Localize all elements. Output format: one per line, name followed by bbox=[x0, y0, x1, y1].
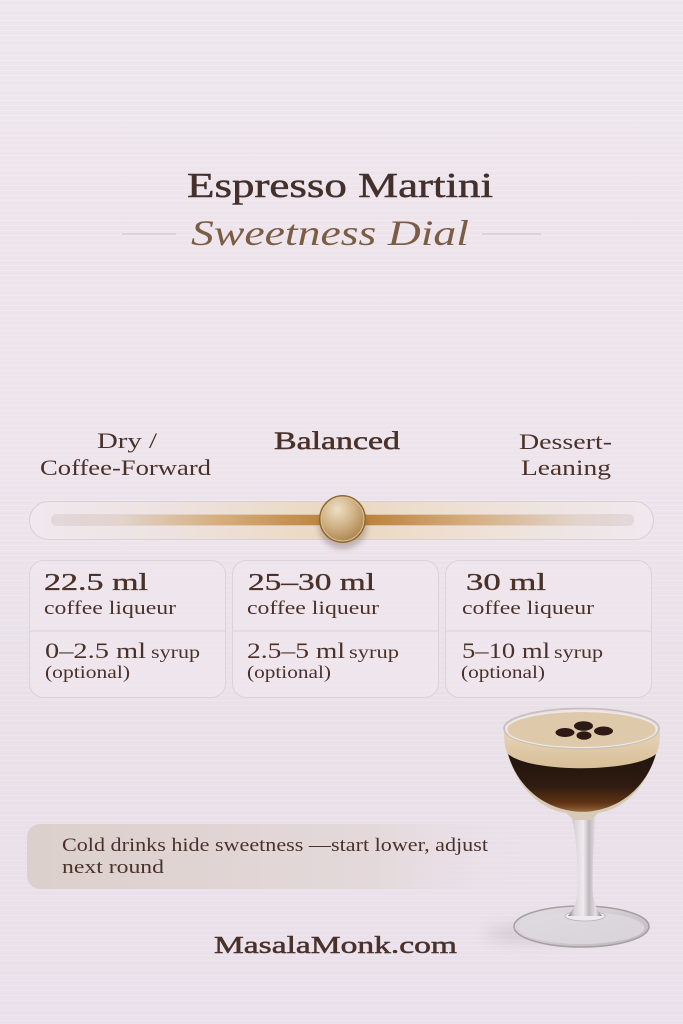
label: dry: Dry / bbox=[97, 428, 158, 453]
coffee liquid bbox=[508, 754, 656, 812]
label: dry: Coffee-Forward bbox=[40, 455, 211, 480]
icon: espresso martini glass bbox=[485, 708, 660, 947]
title: Espresso Martini bbox=[187, 166, 493, 205]
callout bbox=[27, 824, 527, 889]
coffee beans bbox=[556, 721, 613, 740]
card: dry: syrup bbox=[151, 642, 200, 662]
callout: next round bbox=[62, 858, 165, 878]
callout: Cold drinks hide sweetness —start lower, adjust bbox=[62, 836, 489, 856]
card: balanced: 25–30 ml bbox=[248, 570, 375, 596]
card: dry: 22.5 ml bbox=[44, 570, 148, 596]
glass bowl bbox=[504, 732, 660, 820]
title bbox=[187, 166, 493, 253]
slider knob bbox=[319, 495, 366, 543]
card: balanced: syrup bbox=[349, 642, 399, 662]
card: dry bbox=[30, 560, 226, 698]
card: dry: (optional) bbox=[45, 662, 130, 683]
subtitle rule: left bbox=[122, 233, 176, 235]
card: balanced: coffee liqueur bbox=[247, 598, 380, 619]
card: balanced: 2.5–5 ml bbox=[247, 638, 345, 663]
glass stem bbox=[568, 818, 602, 916]
card: balanced: (optional) bbox=[247, 662, 331, 683]
foam layer bbox=[504, 732, 660, 768]
card: dry: coffee liqueur bbox=[44, 598, 177, 619]
slider bbox=[30, 495, 654, 549]
website: MasalaMonk.com bbox=[214, 933, 457, 959]
card: dry: 0–2.5 ml bbox=[45, 638, 146, 663]
subtitle: Sweetness Dial bbox=[191, 213, 469, 253]
label: dessert: Dessert- bbox=[519, 429, 612, 454]
card: balanced bbox=[232, 560, 438, 698]
card: dessert bbox=[446, 560, 652, 698]
label: balanced: Balanced bbox=[274, 428, 401, 455]
card: dessert: 5–10 ml bbox=[462, 638, 550, 663]
label: dessert: Leaning bbox=[521, 455, 611, 480]
glass foot bbox=[514, 906, 649, 947]
slider housing bbox=[30, 502, 654, 540]
card: dessert: (optional) bbox=[461, 662, 545, 683]
card: dessert: 30 ml bbox=[466, 570, 546, 596]
subtitle rule: right bbox=[482, 233, 541, 235]
card: dessert: coffee liqueur bbox=[462, 598, 595, 619]
card: dessert: syrup bbox=[554, 642, 603, 662]
label: dry bbox=[40, 428, 211, 480]
glass rim bbox=[504, 708, 659, 748]
slider track bbox=[52, 514, 634, 526]
label: dessert bbox=[519, 429, 612, 480]
foam top bbox=[508, 712, 656, 746]
